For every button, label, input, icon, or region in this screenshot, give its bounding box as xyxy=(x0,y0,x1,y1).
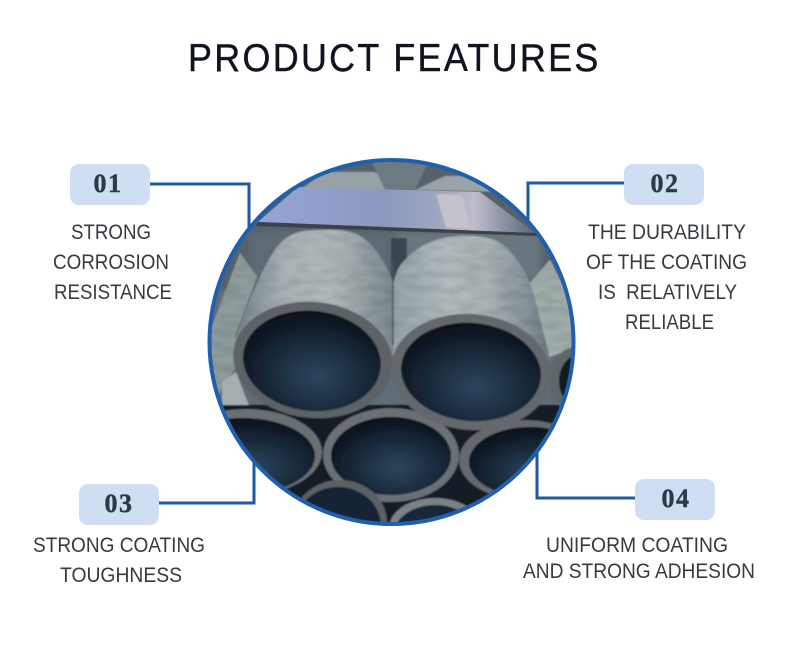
badge 03 xyxy=(79,484,159,525)
feature 01 xyxy=(53,164,172,304)
connector line 03 xyxy=(159,462,254,503)
text 02: OF THE COATING xyxy=(586,250,747,274)
badge 04 xyxy=(635,479,715,520)
text 01: STRONG xyxy=(71,220,151,244)
background tubes xyxy=(220,162,556,290)
metal strap xyxy=(256,187,537,236)
badge 02: 02 xyxy=(650,169,680,198)
connector line 04 xyxy=(537,452,635,498)
far side tubes xyxy=(205,253,580,408)
central photo: stacked galvanized pipes xyxy=(208,158,576,526)
badge 04: 04 xyxy=(662,484,690,513)
badge 01: 01 xyxy=(94,169,122,198)
text 04 xyxy=(523,533,755,583)
badge 02 xyxy=(624,164,704,205)
left main tube body xyxy=(234,230,393,365)
text 04: UNIFORM COATING xyxy=(546,533,728,557)
feature 04 xyxy=(523,479,755,583)
feature 03 xyxy=(33,484,205,587)
text 03: STRONG COATING xyxy=(33,533,205,557)
right main tube body xyxy=(392,235,550,362)
text 03: TOUGHNESS xyxy=(60,563,182,587)
text 02: RELIABLE xyxy=(625,310,714,334)
text 01: RESISTANCE xyxy=(54,280,172,304)
text 02: IS RELATIVELY xyxy=(598,280,737,304)
left pipe opening xyxy=(232,301,393,420)
right pipe opening xyxy=(392,313,550,432)
connector line 02 xyxy=(528,183,624,222)
far right pipe end xyxy=(550,347,572,407)
title: PRODUCT FEATURES xyxy=(188,36,598,79)
text 01: CORROSION xyxy=(53,250,169,274)
text 04: AND STRONG ADHESION xyxy=(523,559,755,583)
text 01 xyxy=(53,220,172,304)
feature 02 xyxy=(586,164,747,334)
text 03 xyxy=(33,533,205,587)
connector line 01 xyxy=(150,184,249,228)
text 02: THE DURABILITY xyxy=(588,220,746,244)
lower row of pipes xyxy=(222,404,560,522)
circle border xyxy=(210,160,574,524)
text 02 xyxy=(586,220,747,334)
badge 03: 03 xyxy=(104,489,134,518)
